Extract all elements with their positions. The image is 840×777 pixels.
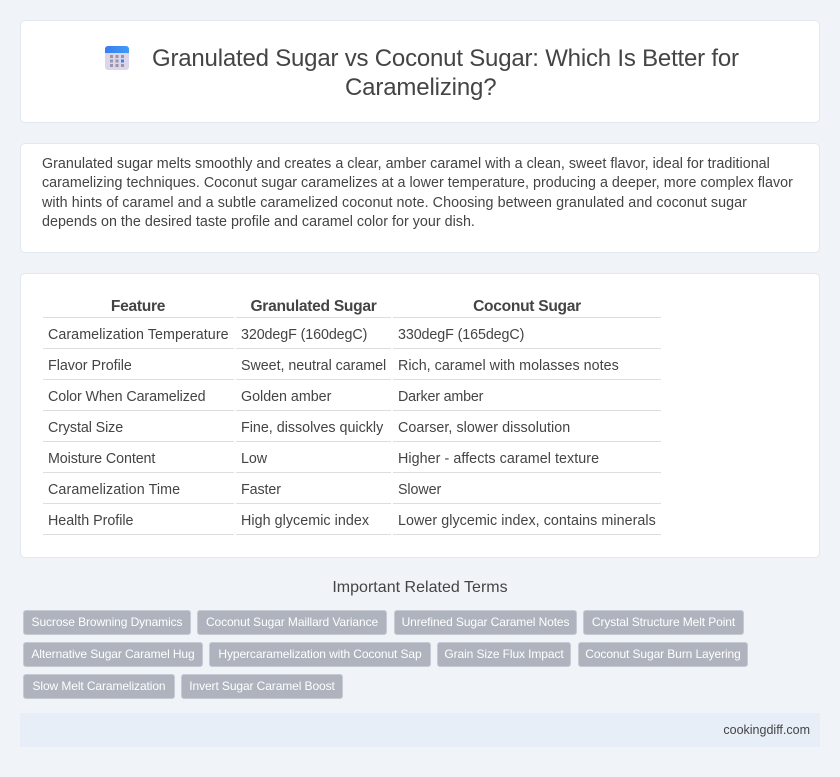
- tag: Sucrose Browning Dynamics: [32, 615, 182, 629]
- comparison table: High glycemic index: [241, 513, 369, 529]
- title: Caramelizing?: [345, 74, 496, 101]
- tag: [181, 674, 343, 699]
- icon: calendar: [105, 46, 129, 70]
- tag: [209, 642, 431, 667]
- footer bar: [20, 713, 820, 747]
- comparison table: Fine, dissolves quickly: [241, 420, 383, 436]
- tag: [394, 610, 577, 635]
- tag: [23, 610, 191, 635]
- row: Caramelization Temperature: Caramelization Temperature: [48, 327, 229, 343]
- comparison table: Darker amber: [398, 389, 483, 405]
- row: Moisture Content: Moisture Content: [48, 451, 155, 467]
- tag: [23, 642, 203, 667]
- related terms tags: [23, 610, 748, 699]
- intro paragraph: depends on the desired taste profile and caramel color for your dish.: [42, 214, 475, 230]
- header: Granulated Sugar: Granulated Sugar: [250, 298, 377, 315]
- header panel: [20, 20, 820, 123]
- comparison table: Coarser, slower dissolution: [398, 420, 570, 436]
- row: Health Profile: Health Profile: [48, 513, 133, 529]
- intro paragraph: Granulated sugar melts smoothly and creates a clear, amber caramel with a clean, sweet flavor, ideal for traditional: [42, 156, 770, 172]
- tag: Coconut Sugar Burn Layering: [585, 647, 741, 661]
- comparison table: [43, 298, 661, 535]
- tag: Coconut Sugar Maillard Variance: [206, 615, 378, 629]
- comparison table: Lower glycemic index, contains minerals: [398, 513, 656, 529]
- row: Caramelization Time: Caramelization Time: [48, 482, 180, 498]
- comparison table: Golden amber: [241, 389, 331, 405]
- tag: [578, 642, 748, 667]
- comparison table: Higher - affects caramel texture: [398, 451, 599, 467]
- tag: Slow Melt Caramelization: [32, 679, 165, 693]
- row: Color When Caramelized: Color When Caramelized: [48, 389, 206, 405]
- header: Feature: Feature: [111, 298, 165, 315]
- comparison table: Rich, caramel with molasses notes: [398, 358, 619, 374]
- tag: Crystal Structure Melt Point: [592, 615, 735, 629]
- tag: Hypercaramelization with Coconut Sap: [218, 647, 422, 661]
- title: [152, 45, 739, 101]
- comparison table panel: [20, 273, 820, 558]
- row: Crystal Size: Crystal Size: [48, 420, 123, 436]
- comparison table: 320degF (160degC): [241, 327, 367, 343]
- tag: Alternative Sugar Caramel Hug: [31, 647, 195, 661]
- tag: Grain Size Flux Impact: [444, 647, 564, 661]
- tag: [23, 674, 175, 699]
- comparison table: Low: [241, 451, 267, 467]
- comparison table: Sweet, neutral caramel: [241, 358, 386, 374]
- comparison table: 330degF (165degC): [398, 327, 524, 343]
- comparison table: Slower: [398, 482, 441, 498]
- intro paragraph: [42, 156, 793, 230]
- tag: Invert Sugar Caramel Boost: [189, 679, 335, 693]
- footer source: cookingdiff.com: [723, 723, 810, 737]
- tag: [437, 642, 571, 667]
- comparison table: Faster: [241, 482, 281, 498]
- tag: [583, 610, 744, 635]
- title: Granulated Sugar vs Coconut Sugar: Which Is Better for: [152, 45, 739, 72]
- intro text panel: [20, 143, 820, 253]
- tag: [197, 610, 387, 635]
- related terms heading: Important Related Terms: [332, 579, 508, 596]
- header: Coconut Sugar: Coconut Sugar: [473, 298, 581, 315]
- intro paragraph: caramelizing techniques. Coconut sugar caramelizes at a lower temperature, producing a deeper, more complex flavor: [42, 175, 793, 191]
- intro paragraph: with hints of caramel and a subtle caramelized coconut note. Choosing between granulated and coconut sugar: [42, 195, 747, 211]
- row: Flavor Profile: Flavor Profile: [48, 358, 132, 374]
- tag: Unrefined Sugar Caramel Notes: [402, 615, 569, 629]
